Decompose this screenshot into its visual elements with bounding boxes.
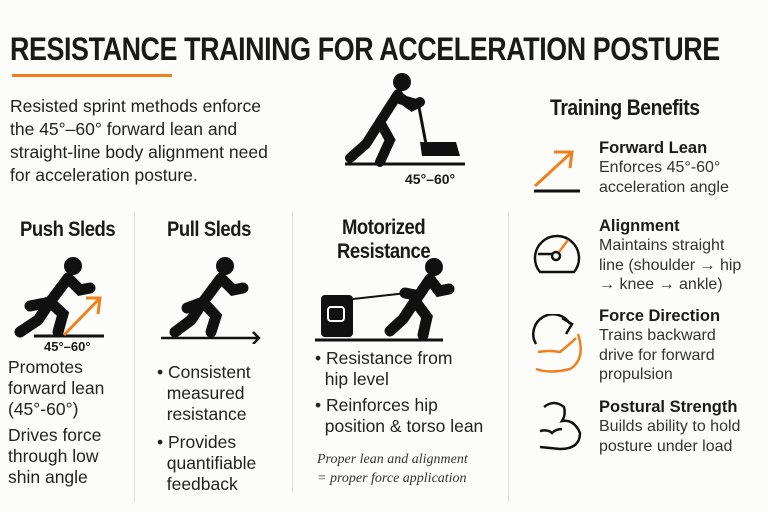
text: shin angle	[8, 467, 88, 487]
text	[599, 398, 740, 454]
heading: Training Benefits	[550, 95, 700, 120]
text: → knee → ankle)	[599, 276, 723, 293]
heading	[337, 216, 430, 263]
panel: push sleds	[8, 218, 115, 487]
angle label: 45°–60°	[405, 171, 455, 187]
text: Promotes	[8, 357, 83, 377]
benefit: postural strength	[540, 398, 740, 454]
title underline	[12, 74, 172, 77]
heading: Push Sleds	[20, 218, 115, 241]
intro text	[10, 96, 268, 185]
bullets: quantifiable	[167, 453, 256, 473]
text	[599, 217, 741, 293]
text: Force Direction	[599, 307, 720, 325]
bullets: measured	[167, 383, 245, 403]
heading: Pull Sleds	[167, 218, 251, 241]
dividers	[134, 212, 135, 502]
text: Alignment	[599, 217, 680, 235]
bullets: • Consistent	[157, 362, 251, 382]
text: propulsion	[599, 366, 673, 383]
text: (45°-60°) Drives force	[8, 399, 101, 445]
panel: training benefits	[532, 95, 741, 454]
icon: sled push figure	[345, 73, 465, 167]
bullets: resistance	[167, 404, 246, 424]
text: Trains backward	[599, 327, 716, 344]
text: acceleration angle	[599, 178, 729, 196]
icon: push figure with arrow	[14, 257, 104, 338]
heading: Motorized	[342, 216, 425, 239]
icon: motor and figure	[315, 258, 454, 342]
icon: pull figure	[161, 257, 261, 344]
benefit: forward lean	[534, 139, 729, 196]
intro text: straight-line body alignment need	[10, 142, 268, 162]
text	[599, 307, 720, 383]
bullets: hip level	[325, 369, 389, 389]
text: through low	[8, 446, 98, 466]
text: Forward Lean	[599, 139, 707, 157]
text: Enforces 45°-60°	[599, 159, 720, 176]
intro text: for acceleration posture.	[10, 165, 198, 185]
intro text: the 45°–60° forward lean and	[10, 119, 237, 139]
text: posture under load	[599, 438, 732, 454]
benefit: alignment	[534, 217, 741, 293]
benefit: force direction	[532, 307, 720, 383]
callout note: = proper force application	[317, 471, 467, 486]
intro text: Resisted sprint methods enforce	[10, 96, 261, 116]
bullets: position & torso lean	[325, 416, 483, 436]
heading: Resistance	[337, 240, 430, 263]
text: drive for forward	[599, 346, 715, 364]
text: Builds ability to hold	[599, 418, 740, 435]
angle label: 45°–60°	[44, 339, 91, 354]
callout note: Proper lean and alignment	[317, 452, 468, 467]
bullets: • Resistance from	[315, 348, 452, 368]
text: line (shoulder → hip	[599, 256, 741, 274]
text	[599, 139, 729, 196]
bullets	[157, 362, 256, 494]
icon: bicep	[540, 402, 582, 450]
text	[8, 357, 104, 487]
bullets: • Reinforces hip	[315, 395, 438, 415]
panel: pull sleds	[157, 218, 261, 494]
text: forward lean	[8, 378, 104, 398]
panel: motorized resistance	[315, 216, 483, 486]
text: Maintains straight	[599, 237, 724, 254]
callout note	[316, 452, 468, 486]
bullets	[315, 348, 483, 436]
title: RESISTANCE TRAINING FOR ACCELERATION POSTURE	[10, 31, 720, 67]
bullets: • Provides	[157, 432, 236, 452]
icon: curved arrow arm	[532, 314, 582, 373]
icon: arrow	[534, 150, 580, 192]
icon: gauge	[534, 234, 580, 274]
text: Postural Strength	[599, 398, 737, 416]
bullets: feedback	[167, 474, 238, 494]
